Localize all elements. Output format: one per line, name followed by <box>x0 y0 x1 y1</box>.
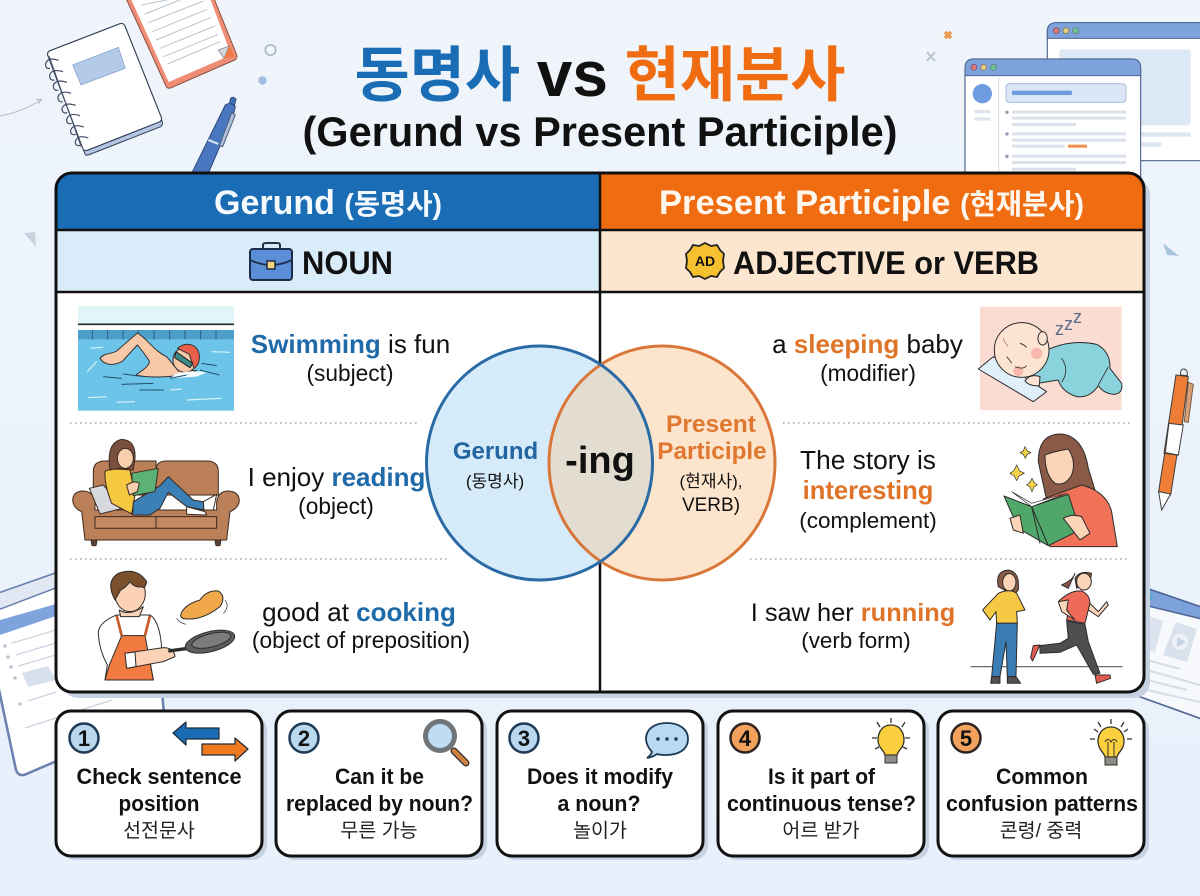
venn: outlines <box>426 346 775 580</box>
example: running: (verb form) <box>801 628 911 653</box>
panel shadow <box>62 179 1150 698</box>
header: present participle <box>600 173 1144 230</box>
number badge 3 <box>510 724 538 752</box>
card 1: 선전문사 <box>123 820 195 842</box>
card 1: position <box>118 791 200 816</box>
number badge 2: 2 <box>298 726 310 751</box>
title: Korean line: 동명사 vs 현재분사 <box>355 38 845 110</box>
number badge 1 <box>70 724 98 752</box>
panel body <box>56 173 1144 692</box>
icon: filament bulb <box>1090 719 1132 765</box>
example: reading: (object) <box>298 493 374 519</box>
illustration: sleeping baby <box>978 307 1122 410</box>
card 3: 놀이가 <box>573 820 627 842</box>
card 5 <box>938 711 1149 860</box>
example: interesting: The story is <box>800 445 936 475</box>
venn: overlap <box>550 366 651 560</box>
example: swimming <box>251 329 450 386</box>
example: running: I saw her running <box>751 599 955 627</box>
icon: AD badge <box>686 243 724 279</box>
illustration: reading on couch <box>73 439 239 546</box>
example: sleeping <box>772 329 963 386</box>
decoration: triangle left <box>24 232 36 247</box>
number badge 4 <box>730 724 760 752</box>
icon: swap arrows <box>173 722 248 761</box>
decoration: ring dot <box>265 45 276 55</box>
decoration: gray cross <box>927 52 935 61</box>
venn label: gerund <box>453 438 538 491</box>
venn: gerund circle <box>426 346 652 580</box>
card 2: replaced by noun? <box>286 791 473 816</box>
icon: AD badge: AD <box>695 253 715 269</box>
venn label: gerund: (동명사) <box>466 472 524 491</box>
icon: magnifier <box>426 722 466 763</box>
example: cooking: (object of preposition) <box>252 627 470 653</box>
icon: spiral notebook <box>46 23 162 155</box>
card 5: Common <box>996 764 1088 789</box>
venn label: present participle <box>657 411 767 516</box>
example: reading: I enjoy reading <box>248 462 425 492</box>
example: sleeping: (modifier) <box>820 360 916 386</box>
card 4: Is it part of <box>768 764 875 789</box>
back browser window <box>1047 23 1200 161</box>
card 1 <box>56 711 267 860</box>
title <box>302 38 898 155</box>
venn label: present participle: Present <box>666 411 756 438</box>
title: English subtitle: (Gerund vs Present Participle) <box>302 108 898 155</box>
card 3 <box>497 711 708 860</box>
icon: speech bubble <box>646 723 688 758</box>
subheader: noun <box>56 230 600 292</box>
decoration: tablet bottom left <box>0 540 164 775</box>
decoration: blue dot <box>258 76 267 85</box>
header: gerund: Gerund (동명사) <box>214 184 442 222</box>
front browser window <box>965 59 1141 180</box>
illustration: standing woman and runner <box>971 570 1123 683</box>
number badge 5: 5 <box>960 726 972 751</box>
decoration: tablet bottom right <box>1135 586 1200 722</box>
panel outline <box>56 173 1144 692</box>
card 3: Does it modify <box>527 764 673 789</box>
example: reading <box>248 462 425 519</box>
venn label: present participle: Participle <box>657 438 767 465</box>
number badge 1: 1 <box>78 726 90 751</box>
example: interesting: interesting <box>803 477 933 505</box>
example: swimming: Swimming is fun <box>251 329 450 359</box>
card 5: confusion patterns <box>946 791 1138 816</box>
icon: briefcase <box>250 243 292 280</box>
card 3: a noun? <box>558 791 640 816</box>
card 1: Check sentence <box>76 764 242 789</box>
center divider <box>599 173 601 692</box>
icon: paper sheet <box>126 0 237 88</box>
example: running <box>751 599 955 653</box>
venn: participle circle <box>549 346 775 580</box>
example: sleeping: a sleeping baby <box>772 329 963 359</box>
venn label: -ing: -ing <box>565 440 635 482</box>
venn diagram <box>426 346 775 580</box>
venn label: present participle: VERB) <box>682 495 740 516</box>
example: swimming: (subject) <box>306 360 394 386</box>
example: interesting <box>799 445 937 533</box>
example: cooking <box>252 597 470 653</box>
decoration: orange pen right <box>1159 369 1193 510</box>
icon: blue pen <box>192 97 236 173</box>
number badge 3: 3 <box>518 726 530 751</box>
illustration: swimmer <box>78 306 234 411</box>
illustration: reading woman <box>1004 434 1117 547</box>
illustration: cooking <box>98 571 237 680</box>
label: zzz: z <box>1055 319 1064 339</box>
venn label: gerund: Gerund <box>453 438 538 465</box>
decoration: orange cross <box>945 32 951 38</box>
example: interesting: (complement) <box>799 508 937 533</box>
venn label: present participle: (현재사), <box>680 472 742 491</box>
label: zzz: z <box>1073 307 1082 327</box>
number badge 2 <box>290 724 318 752</box>
number badge 5 <box>952 724 980 752</box>
card 2: Can it be <box>335 764 424 789</box>
label: zzz: z <box>1064 314 1073 334</box>
subheader: noun: NOUN <box>302 245 393 281</box>
card 2 <box>276 711 487 860</box>
card 2: 무른 가능 <box>340 820 418 842</box>
card 4: continuous tense? <box>727 791 916 816</box>
number badge 4: 4 <box>739 726 752 751</box>
card 5: 콘령/ 중력 <box>1000 820 1082 842</box>
decoration: browser windows top right <box>965 23 1200 180</box>
card 4: 어르 받가 <box>782 820 860 842</box>
main comparison panel <box>56 173 1150 698</box>
decoration: triangle right <box>1163 243 1179 256</box>
icon: light bulb <box>872 718 910 763</box>
arrow: thin curved line <box>0 99 42 116</box>
header: gerund <box>56 173 600 230</box>
decoration: left notebook and paper <box>0 0 237 173</box>
card 4 <box>718 711 929 860</box>
subheader: adjective or verb <box>600 230 1144 292</box>
header: present participle: Present Participle (현재분사) <box>659 184 1084 222</box>
example: cooking: good at cooking <box>262 597 456 627</box>
subheader: adjective or verb: ADJECTIVE or VERB <box>733 245 1039 281</box>
